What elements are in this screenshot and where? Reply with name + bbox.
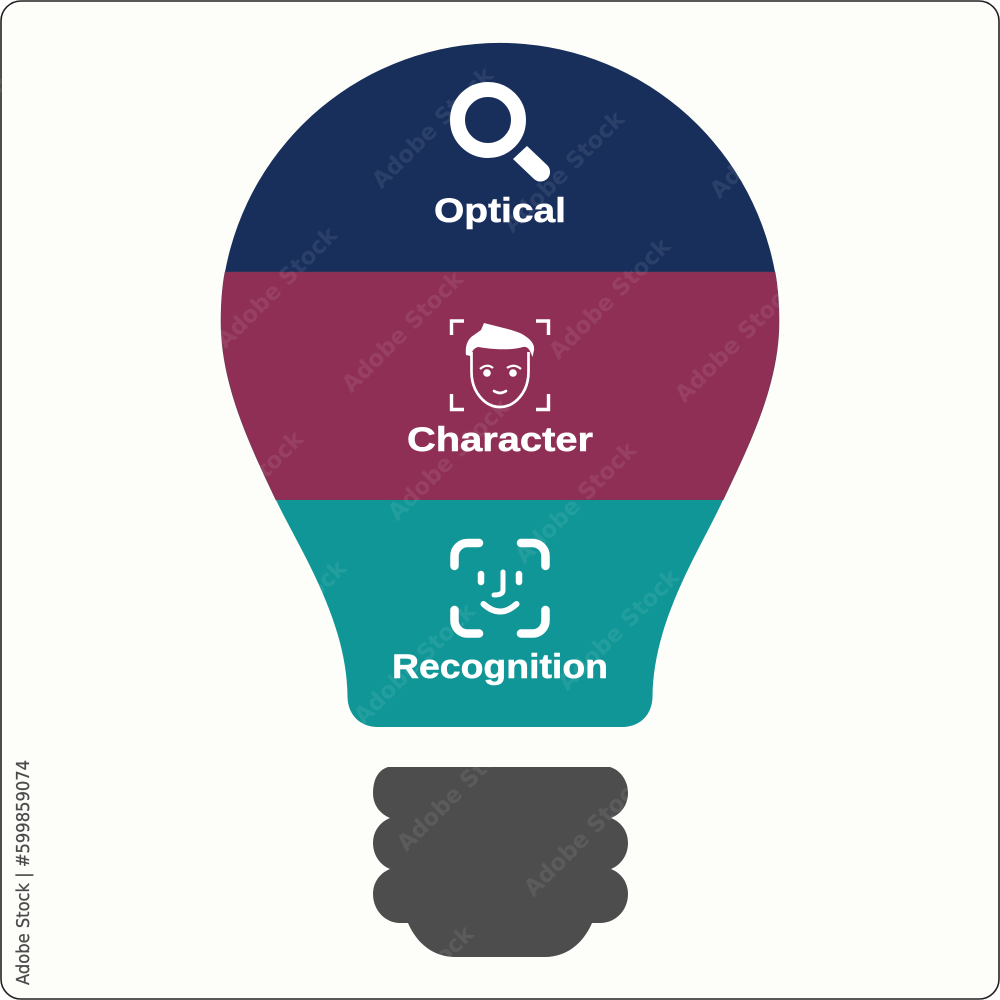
eyes	[481, 574, 519, 582]
hair	[466, 323, 534, 357]
watermark pattern: Adobe Stock	[187, 757, 319, 889]
heading: Optical: Optical	[434, 192, 566, 230]
watermark pattern: Adobe Stock	[59, 712, 191, 844]
frame corners	[454, 543, 546, 634]
watermark pattern: Adobe Stock	[16, 589, 148, 721]
watermark pattern: Adobe Stock	[853, 777, 985, 909]
watermark pattern: Adobe Stock	[869, 573, 1000, 705]
watermark pattern: Adobe	[852, 7, 948, 103]
face outline	[472, 352, 528, 407]
watermark pattern: Adobe Stock	[211, 222, 343, 354]
watermark pattern: Adobe Stock	[867, 242, 999, 374]
watermark pattern: Adobe Stock	[544, 233, 676, 365]
icon: face in scan frame	[452, 321, 548, 410]
mouth	[494, 391, 506, 393]
watermark pattern: Adobe Stock	[716, 403, 848, 535]
bulb segment: recognition	[276, 500, 723, 727]
watermark pattern: Adobe Stock	[220, 555, 352, 687]
watermark pattern: Adobe Stock	[725, 734, 857, 866]
watermark pattern: Adobe Stock	[510, 437, 642, 569]
watermark pattern: Adobe	[655, 7, 751, 103]
watermark pattern: Adobe Stock	[682, 607, 814, 739]
watermark pattern: Adobe Stock	[392, 725, 524, 857]
watermark pattern: Adobe Stock	[843, 446, 975, 578]
watermark pattern: Adobe Stock	[50, 379, 182, 511]
icon: magnifying glass	[458, 90, 550, 182]
watermark pattern: Adobe Stock	[337, 266, 469, 398]
watermark pattern: Adobe Stock	[383, 394, 515, 526]
bulb segment: character	[221, 272, 779, 500]
watermark pattern: Adobe Stock	[566, 867, 698, 999]
watermark pattern: Adobe	[317, 7, 413, 103]
eyebrows	[480, 366, 521, 369]
light bulb	[221, 43, 779, 727]
watermark pattern: Adobe Stock	[498, 106, 630, 238]
bulb segment: optical	[225, 43, 775, 272]
watermark pattern: Stock	[81, 916, 149, 984]
watermark pattern: Adobe Stock	[519, 770, 651, 902]
watermark pattern: Adobe Stock	[177, 426, 309, 558]
heading: Character: Character	[407, 421, 593, 459]
scan frame corners	[452, 321, 548, 410]
watermark pattern: Adobe Stock	[705, 72, 837, 204]
watermark pattern: Adobe Stock	[39, 54, 171, 186]
watermark pattern: Adobe Stock	[165, 97, 297, 229]
nose	[494, 572, 503, 595]
stock id side label: Adobe Stock | #599859074	[13, 760, 34, 985]
watermark pattern: Stock	[746, 926, 814, 994]
eyes	[483, 369, 491, 377]
watermark pattern: Adobe Stock	[553, 564, 685, 696]
bulb screw base	[373, 767, 628, 957]
watermark pattern: Adobe Stock	[831, 115, 963, 247]
watermark pattern: Stock	[411, 921, 479, 989]
watermark pattern: Adobe Stock	[233, 867, 365, 999]
watermark pattern: Adobe Stock	[349, 598, 481, 730]
watermark pattern: Adobe Stock	[4, 254, 136, 386]
smile	[484, 604, 516, 612]
icon: face recognition frame	[454, 543, 546, 634]
watermark pattern: Stock	[916, 916, 984, 984]
watermark pattern: Adobe Stock	[367, 62, 499, 194]
heading: Recognition: Recognition	[392, 648, 608, 686]
watermark pattern: Adobe Stock	[670, 276, 802, 408]
